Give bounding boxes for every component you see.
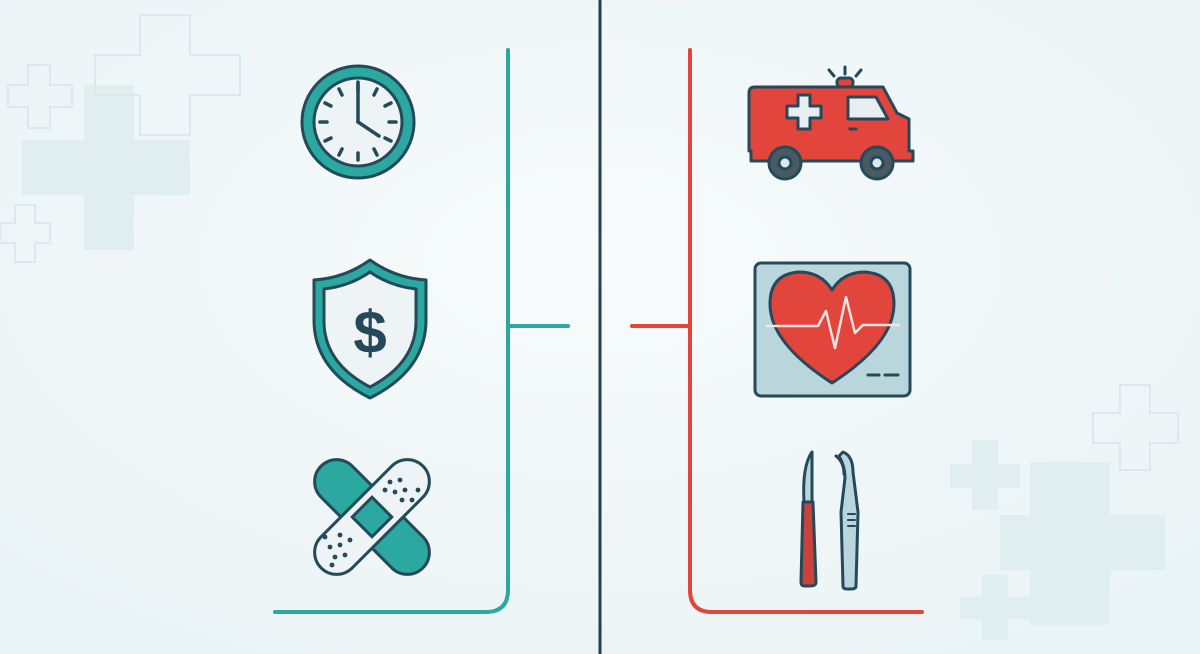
icon: bandages bbox=[306, 451, 438, 583]
icon: shield dollar bbox=[314, 260, 426, 398]
icon: ambulance bbox=[749, 67, 913, 179]
red bracket bbox=[632, 50, 922, 612]
icon: scalpel and tweezers bbox=[801, 452, 858, 589]
icon: heart monitor bbox=[755, 263, 910, 396]
icon: clock bbox=[302, 66, 414, 178]
teal bracket bbox=[275, 50, 568, 612]
icon: shield dollar: $ bbox=[353, 299, 387, 366]
center divider bbox=[598, 0, 602, 654]
